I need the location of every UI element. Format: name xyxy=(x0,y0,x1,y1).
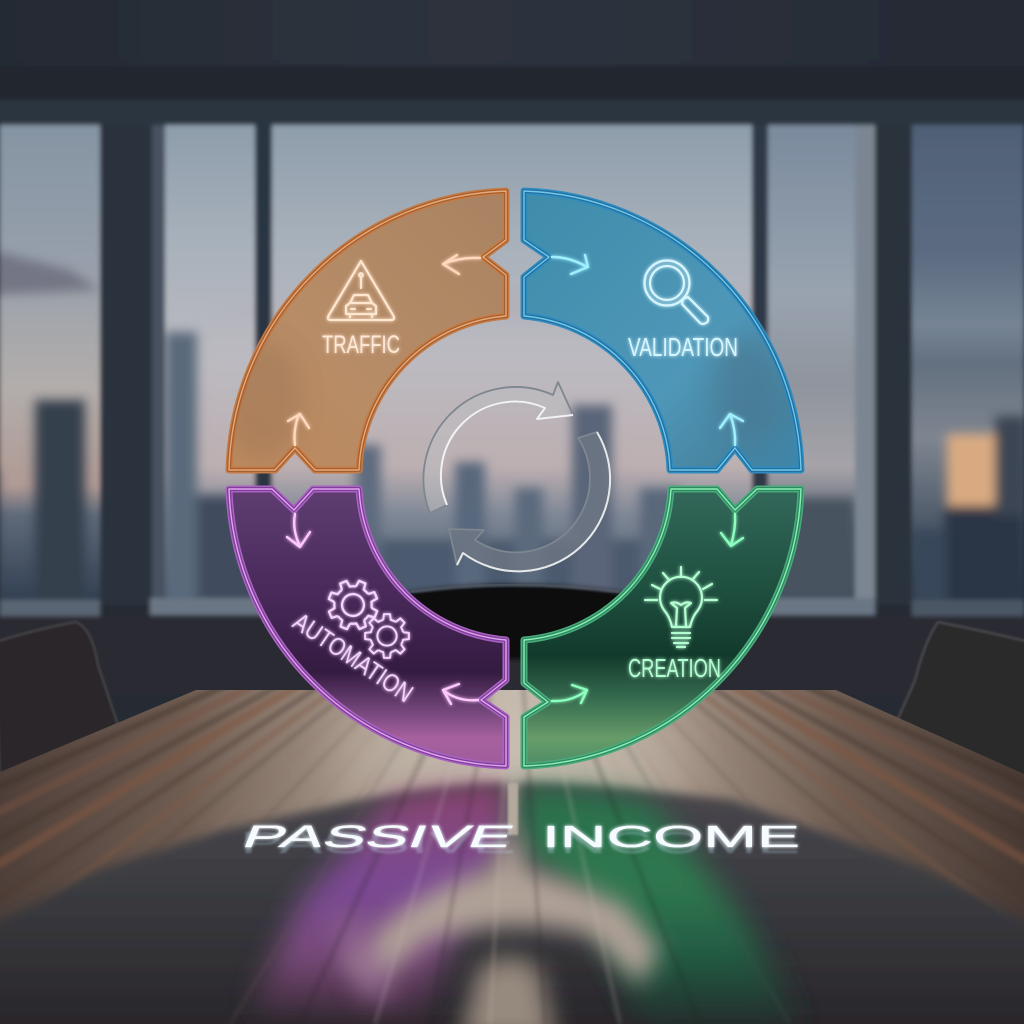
arrow: automation bottom xyxy=(443,684,478,704)
title reflection: INCOME xyxy=(542,825,800,860)
title reflection xyxy=(240,825,800,860)
arrow: validation bottom xyxy=(720,414,743,445)
label: creation: CREATION xyxy=(628,653,721,683)
segment: creation xyxy=(524,489,801,766)
central glass cycle arrows xyxy=(423,382,610,571)
title: passive income: PASSIVE xyxy=(237,819,519,854)
right chair xyxy=(895,622,1024,790)
lower arrow xyxy=(449,432,610,571)
icon: magnifying glass xyxy=(644,260,708,324)
left chair xyxy=(0,622,118,790)
wooden table xyxy=(0,690,1024,1024)
label: validation: VALIDATION xyxy=(628,332,738,362)
title: passive income xyxy=(237,819,800,854)
arrow: traffic bottom xyxy=(288,414,309,445)
segment: automation xyxy=(229,489,506,766)
arrow: validation top xyxy=(552,255,588,274)
upper arrow xyxy=(423,382,573,513)
table shadow under the wheel xyxy=(0,783,1024,1024)
arrow: automation top xyxy=(287,514,310,547)
label: automation: AUTOMATION xyxy=(288,608,418,708)
arrow: creation top xyxy=(721,514,743,546)
title: passive income: INCOME xyxy=(542,819,800,854)
icon: gears xyxy=(321,573,409,658)
label: traffic: TRAFFIC xyxy=(322,331,400,359)
arrow: traffic top xyxy=(443,255,480,274)
icon: traffic warning triangle with car xyxy=(328,261,394,320)
title reflection: PASSIVE xyxy=(240,825,516,860)
segment: traffic xyxy=(222,191,506,470)
coloured light reflections xyxy=(250,783,800,1024)
arrow: creation bottom xyxy=(552,685,587,703)
icon: light bulb xyxy=(645,567,717,647)
segment: validation xyxy=(524,191,801,470)
blurred office background xyxy=(0,0,1024,722)
